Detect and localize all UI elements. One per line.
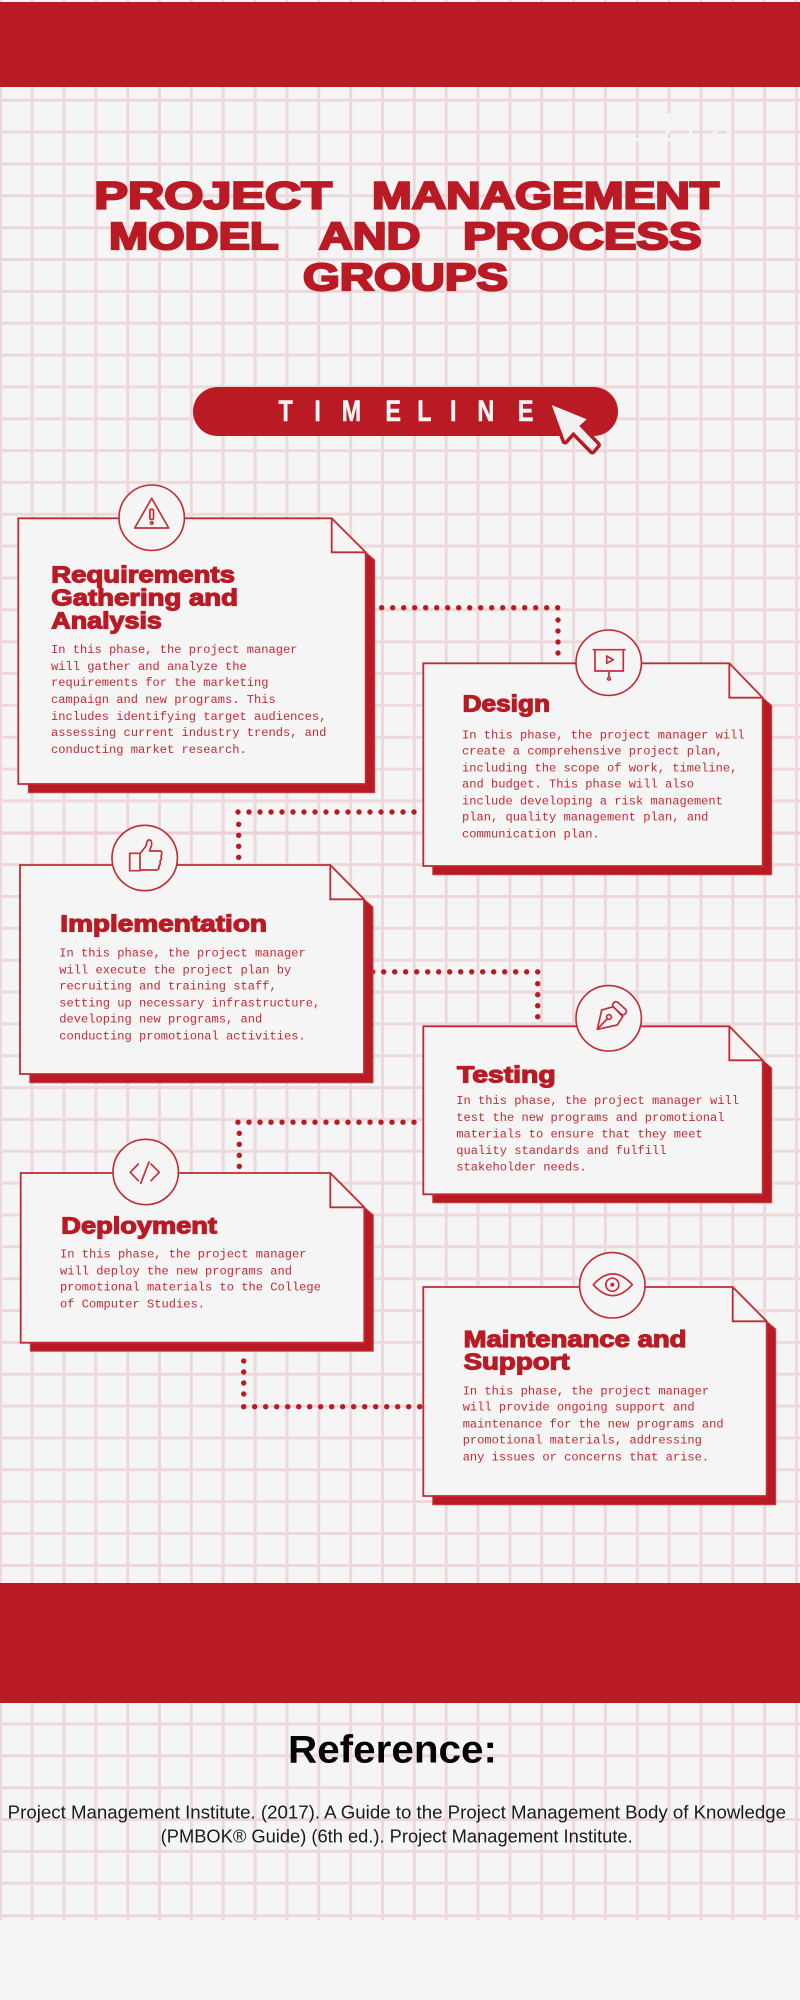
body text [462,728,745,841]
connector: requirements to design [382,608,558,654]
icon: warning triangle [119,485,184,550]
body text: setting up necessary infrastructure, [59,996,320,1010]
body text: recruiting and training staff, [59,979,277,993]
body text: include developing a risk management [462,794,723,808]
body text: stakeholder needs. [456,1160,587,1174]
heading: Implementation [60,911,267,937]
title [94,175,719,299]
title: PROCESS [463,216,702,258]
body text: includes identifying target audiences, [51,710,326,724]
connector: deployment to maintenance [244,1361,420,1407]
body text: of Computer Studies. [60,1297,205,1311]
panel: implementation [20,825,373,1083]
lower red band [0,1583,800,1703]
top red band [0,2,800,87]
timeline pill [193,387,618,451]
body text: will execute the project plan by [59,963,291,977]
body text: materials to ensure that they meet [456,1127,703,1141]
body text: quality standards and fulfill [456,1144,667,1158]
reference citation: Project Management Institute. (2017). A Guide to the Project Management Body of Knowledge [8,1802,786,1822]
body text: In this phase, the project manager will [462,728,745,742]
reference section [8,1728,786,1846]
panel: testing [423,986,772,1203]
connector: design to implementation [238,812,414,858]
body text: will provide ongoing support and [463,1400,695,1414]
body text: any issues or concerns that arise. [463,1450,709,1464]
title: AND [319,216,420,258]
body text [60,1247,321,1311]
heading: Maintenance and [464,1326,686,1352]
connector: testing to deployment [238,1122,414,1167]
body text: will gather and analyze the [51,660,247,674]
heading: Testing [457,1061,556,1087]
reference heading: Reference: [288,1728,497,1771]
body text: In this phase, the project manager [51,643,297,657]
body text: communication plan. [462,827,600,841]
panel: requirements gathering and analysis [18,485,375,793]
body text: maintenance for the new programs and [463,1417,724,1431]
connector: implementation to testing [373,972,538,1017]
reference citation: (PMBOK® Guide) (6th ed.). Project Management Institute. [161,1826,633,1846]
body text: developing new programs, and [59,1013,262,1027]
heading: Support [464,1348,570,1374]
title: MANAGEMENT [372,175,719,217]
body text: In this phase, the project manager [59,946,306,960]
body text: will deploy the new programs and [60,1264,292,1278]
panel: design [423,630,772,875]
body text: promotional materials to the College [60,1280,321,1294]
body text: assessing current industry trends, and [51,726,326,740]
icon: pen nib [576,986,641,1051]
body text: promotional materials, addressing [463,1433,702,1447]
body text: plan, quality management plan, and [462,811,708,825]
body text: In this phase, the project manager will [456,1094,739,1108]
heading: Design [463,690,550,716]
body text: campaign and new programs. This [51,693,276,707]
panel: maintenance and support [423,1253,776,1505]
icon: thumbs up [112,825,177,891]
title: MODEL [109,216,279,258]
body text: In this phase, the project manager [60,1247,306,1261]
body text: conducting promotional activities. [59,1029,306,1043]
body text: requirements for the marketing [51,676,268,690]
heading [51,562,238,633]
body text: In this phase, the project manager [463,1384,709,1398]
body text: create a comprehensive project plan, [462,745,723,759]
body text [51,643,326,757]
body text [456,1094,739,1174]
body text: conducting market research. [51,743,247,757]
body text: including the scope of work, timeline, [462,761,737,775]
icon: code brackets [113,1139,178,1205]
body text [59,946,320,1043]
heading [464,1326,686,1374]
icon: eye [580,1253,645,1318]
heading: Deployment [61,1213,217,1239]
title: GROUPS [303,257,508,299]
body text [463,1384,724,1464]
body text: and budget. This phase will also [462,777,694,791]
heading: Analysis [51,607,162,633]
reference citation [8,1802,786,1846]
heading: Requirements [51,562,235,588]
timeline label: TIMELINE [278,394,534,428]
panel: deployment [21,1139,373,1351]
icon: cursor arrow [552,405,598,451]
title: PROJECT [94,175,332,217]
body text: test the new programs and promotional [456,1111,724,1125]
icon: presentation screen [576,630,641,695]
heading: Gathering and [51,584,238,610]
